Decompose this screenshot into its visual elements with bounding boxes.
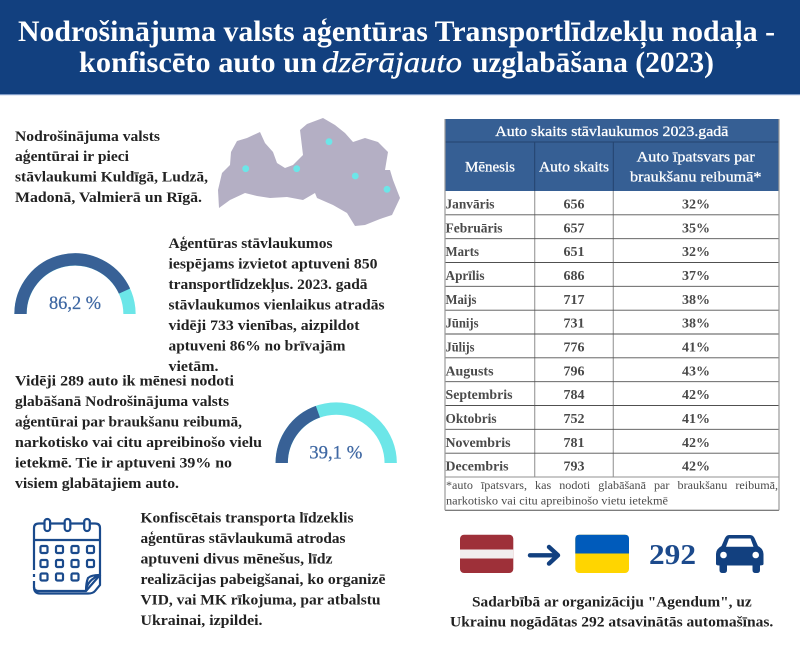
table header: Auto skaits stāvlaukumos 2023.gadā	[495, 124, 729, 140]
text block: parking capacity: aptuveni 86% no brīvajām	[168, 338, 346, 354]
icon: calendar	[34, 519, 100, 594]
table grid lines	[445, 119, 779, 510]
table header: Mēnesis	[465, 160, 515, 176]
table row: Februāris	[446, 221, 710, 236]
table row: Janvāris	[446, 198, 710, 212]
text block: confiscated vehicle duration: aģentūras stāvlaukumā atrodas	[140, 531, 346, 547]
table row: Augusts: Augusts	[446, 364, 494, 379]
caption: cooperation with Agendum: Sadarbībā ar organizāciju "Agendum", uz	[472, 595, 752, 611]
table row: Novembris: 781	[564, 436, 584, 451]
text block: parking capacity: Aģentūras stāvlaukumos	[168, 236, 333, 252]
table row: Maijs: Maijs	[446, 293, 477, 308]
text block: five parking lots	[15, 129, 208, 206]
text block: five parking lots: aģentūrai ir pieci	[15, 149, 129, 165]
table row: Decembris: 793	[564, 460, 584, 475]
header banner with title: uzglabāšana (2023)	[472, 46, 714, 79]
table row: Marts: Marts	[446, 245, 479, 260]
table row: Novembris	[446, 436, 710, 451]
arrow: Latvia to Ukraine	[530, 547, 558, 564]
table row: Augusts	[446, 364, 710, 379]
table row: Decembris	[446, 460, 710, 475]
table row: Janvāris: 32%	[682, 198, 710, 212]
caption: cooperation with Agendum	[450, 595, 774, 631]
table row: Novembris: 42%	[682, 436, 710, 451]
table row: Marts: 651	[564, 245, 584, 260]
table row: Septembris	[446, 388, 710, 403]
table row: Februāris: 35%	[682, 221, 710, 236]
table row: Oktobris	[446, 412, 710, 427]
table header: braukšanu reibumā*	[630, 170, 762, 186]
table header: Auto īpatsvars par	[637, 150, 755, 166]
gauge: 39,1 %: 39,1 %	[309, 442, 362, 463]
table: cars in parking lots 2023	[445, 119, 779, 510]
table row: Aprīlis	[446, 269, 710, 284]
table row: Oktobris: 41%	[682, 412, 710, 427]
table footnote	[446, 478, 778, 508]
table row: Jūlijs	[446, 340, 710, 356]
text block: monthly drunk driving cars: visiem glabātajiem auto.	[15, 476, 179, 492]
table row: Septembris: Septembris	[446, 388, 513, 403]
number: 292 cars: 292	[649, 540, 696, 571]
text block: monthly drunk driving cars: aģentūrai par braukšanu reibumā,	[15, 415, 242, 431]
table footnote: *auto īpatsvars, kas nodoti glabāšanā par braukšanu reibumā,	[446, 478, 778, 492]
table row: Augusts: 796	[564, 364, 584, 379]
table row: Septembris: 42%	[682, 388, 710, 403]
table row: Oktobris: Oktobris	[446, 412, 497, 427]
table row: Decembris: 42%	[682, 460, 710, 475]
icon: Latvian flag	[460, 535, 513, 573]
table row: Jūnijs: 38%	[682, 317, 710, 332]
table row: Jūlijs: Jūlijs	[446, 340, 475, 356]
table footnote: narkotisko vai citu apreibinošo vietu ietekmē	[446, 494, 668, 508]
map of Latvia with parking lot dots	[218, 118, 400, 226]
header banner with title: dzērājauto	[322, 46, 462, 79]
table row: Septembris: 784	[564, 388, 584, 403]
table row: Aprīlis: 37%	[682, 269, 710, 284]
icon: Ukrainian flag	[575, 535, 629, 573]
text block: confiscated vehicle duration	[140, 511, 386, 629]
text block: confiscated vehicle duration: Ukrainai, izpildei.	[140, 613, 263, 629]
table row: Oktobris: 752	[564, 412, 584, 427]
table row: Novembris: Novembris	[446, 436, 511, 451]
text block: parking capacity: vietām.	[168, 359, 219, 375]
table row: Jūlijs: 41%	[682, 340, 710, 356]
text block: confiscated vehicle duration: VID, vai MK rīkojuma, par atbalstu	[140, 593, 380, 609]
text block: monthly drunk driving cars: narkotisko vai citu apreibinošo vielu	[15, 435, 262, 451]
text block: monthly drunk driving cars: Vidēji 289 auto ik mēnesi nodoti	[15, 374, 234, 390]
gauge: 86,2 %	[20, 259, 130, 314]
text block: parking capacity: stāvlaukumos vienlaikus atradās	[168, 298, 385, 314]
text block: parking capacity	[168, 236, 385, 375]
table row: Jūnijs: Jūnijs	[446, 317, 479, 332]
table row: Maijs: 38%	[682, 293, 710, 308]
icon: car	[716, 535, 764, 573]
table row: Jūlijs: 776	[564, 340, 584, 356]
table row: Marts	[446, 245, 710, 260]
table header	[445, 119, 779, 191]
text block: monthly drunk driving cars: glabāšanā Nodrošinājuma valsts	[15, 394, 229, 410]
table row: Maijs: 717	[564, 293, 584, 308]
text block: parking capacity: iespējams izvietot aptuveni 850	[168, 256, 378, 272]
text block: confiscated vehicle duration: Konfiscētais transporta līdzeklis	[140, 511, 354, 527]
table header: Auto skaits	[539, 160, 609, 176]
text block: confiscated vehicle duration: realizācijas pabeigšanai, ko organizē	[140, 572, 386, 588]
table row: Augusts: 43%	[682, 364, 710, 379]
header banner with title: konfiscēto auto un	[79, 46, 317, 79]
text block: parking capacity: transportlīdzekļus. 2023. gadā	[168, 277, 368, 293]
header banner with title	[0, 0, 800, 95]
table row: Decembris: Decembris	[446, 460, 509, 475]
text block: five parking lots: Nodrošinājuma valsts	[15, 129, 160, 145]
table row: Janvāris: Janvāris	[446, 198, 495, 212]
text block: monthly drunk driving cars	[15, 374, 262, 492]
table row: Maijs	[446, 293, 710, 308]
table row: Aprīlis: Aprīlis	[446, 269, 485, 284]
table row: Februāris: 657	[564, 221, 584, 236]
table row: Aprīlis: 686	[564, 269, 584, 284]
text block: confiscated vehicle duration: aptuveni divus mēnešus, līdz	[140, 552, 333, 568]
table row: Janvāris: 656	[564, 198, 584, 212]
text block: five parking lots: Madonā, Valmierā un Rīgā.	[15, 190, 202, 206]
table row: Februāris: Februāris	[446, 221, 503, 236]
gauge: 39,1 %	[282, 409, 391, 463]
caption: cooperation with Agendum: Ukrainu nogādātas 292 atsavinātās automašīnas.	[450, 615, 774, 631]
text block: five parking lots: stāvlaukumi Kuldīgā, Ludzā,	[15, 170, 208, 186]
table row: Jūnijs	[446, 317, 710, 332]
gauge: 86,2 %: 86,2 %	[49, 293, 101, 314]
text block: parking capacity: vidēji 733 vienības, aizpildot	[168, 318, 360, 334]
header banner with title: Nodrošinājuma valsts aģentūras Transportlīdzekļu nodaļa -	[18, 15, 775, 49]
text block: monthly drunk driving cars: ietekmē. Tie ir aptuveni 39% no	[15, 456, 232, 472]
table row: Marts: 32%	[682, 245, 710, 260]
table row: Jūnijs: 731	[564, 317, 584, 332]
